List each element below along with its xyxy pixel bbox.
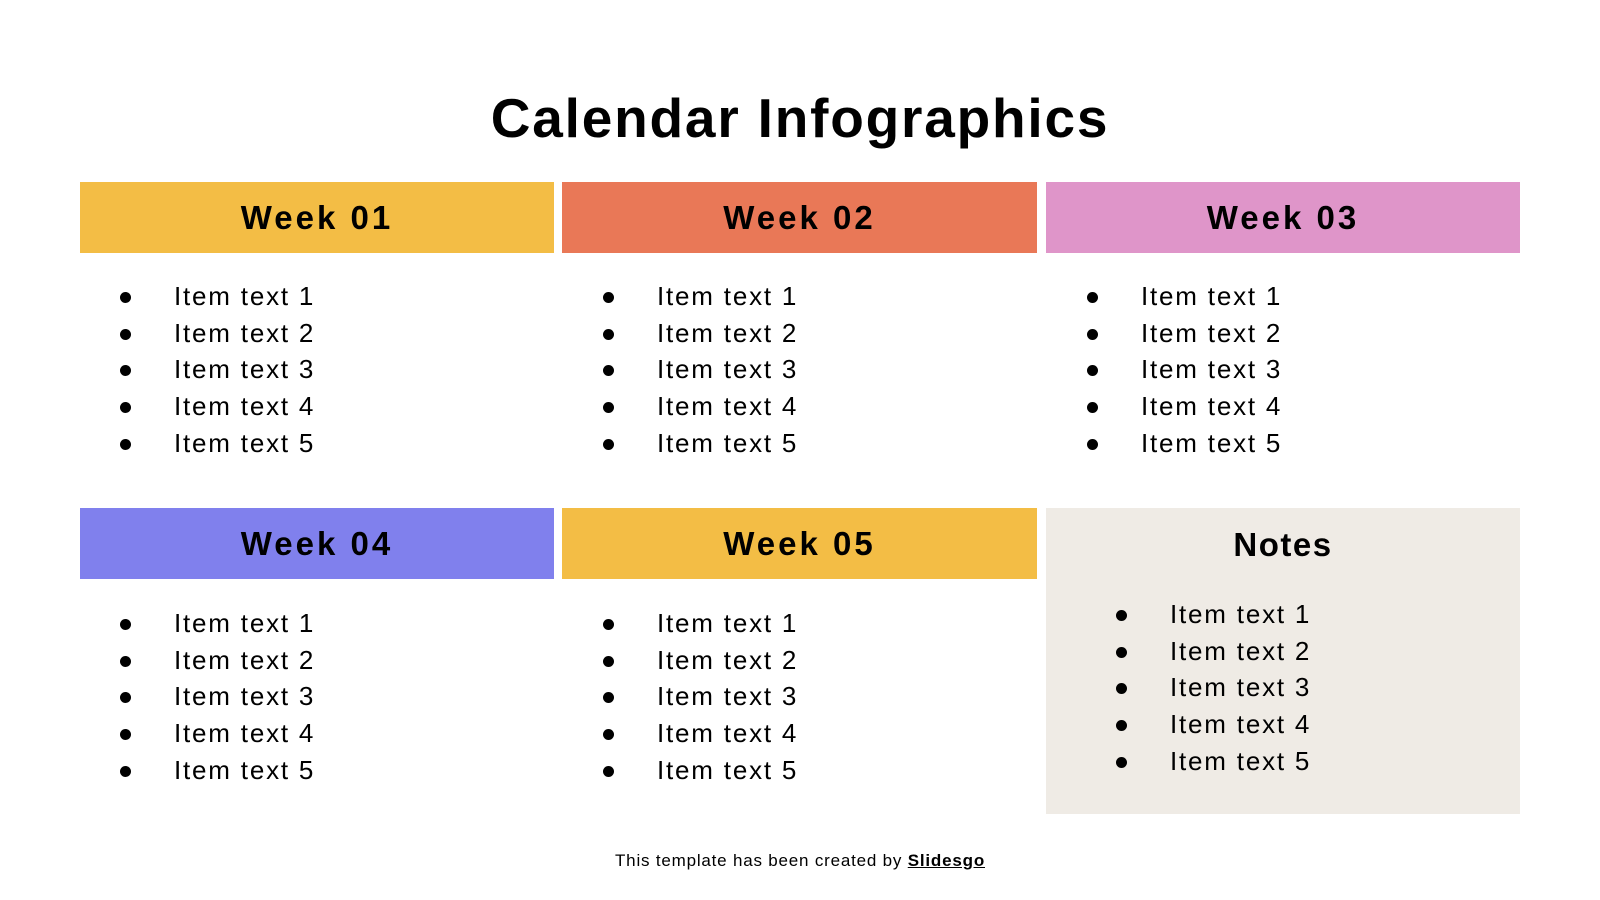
list: week 03: Item text 1 [1141, 281, 1282, 311]
list: week 04: Item text 1 [174, 608, 315, 638]
panel: week 04 header [80, 508, 554, 579]
list: week 05: Item text 1 [657, 608, 798, 638]
notes list: Item text 1 [1170, 599, 1311, 629]
list: week 04: Item text 4 [174, 718, 315, 748]
notes list: Item text 5 [1170, 746, 1311, 776]
list: week 05: Item text 4 [657, 718, 798, 748]
list: week 03: Item text 4 [1141, 391, 1282, 421]
footer credit: This template has been created by Slidesgo [615, 851, 985, 870]
list: week 02: Item text 5 [657, 428, 798, 458]
list: week 02 [603, 281, 798, 458]
panel: week 02 header: Week 02 [723, 198, 876, 236]
list: week 01 [120, 281, 315, 458]
list: week 02: Item text 3 [657, 354, 798, 384]
list: week 04: Item text 2 [174, 645, 315, 675]
notes list: Item text 3 [1170, 672, 1311, 702]
list: week 03: Item text 3 [1141, 354, 1282, 384]
list: week 05: Item text 3 [657, 681, 798, 711]
list: week 01: Item text 3 [174, 354, 315, 384]
panel: week 02 header [562, 182, 1037, 253]
list: week 04: Item text 5 [174, 755, 315, 785]
list: week 02: Item text 2 [657, 318, 798, 348]
panel: week 05 header [562, 508, 1037, 579]
list: week 05: Item text 5 [657, 755, 798, 785]
panel: week 03 header: Week 03 [1207, 198, 1359, 236]
list: week 05 [603, 608, 798, 785]
list: week 02: Item text 1 [657, 281, 798, 311]
list: week 04 [120, 608, 315, 785]
panel: week 04 header: Week 04 [241, 524, 393, 562]
panel: week 05 header: Week 05 [723, 524, 876, 562]
list: week 03 [1087, 281, 1282, 458]
title: Calendar Infographics [491, 87, 1109, 149]
panel: notes [1046, 508, 1520, 814]
list: week 04: Item text 3 [174, 681, 315, 711]
panel: week 03 header [1046, 182, 1520, 253]
list: week 01: Item text 2 [174, 318, 315, 348]
list: week 01: Item text 5 [174, 428, 315, 458]
list: week 05: Item text 2 [657, 645, 798, 675]
list: week 03: Item text 5 [1141, 428, 1282, 458]
notes heading: Notes [1233, 526, 1333, 563]
list: week 03: Item text 2 [1141, 318, 1282, 348]
list: week 01: Item text 1 [174, 281, 315, 311]
panel: week 01 header [80, 182, 554, 253]
notes list: Item text 4 [1170, 709, 1311, 739]
list: week 02: Item text 4 [657, 391, 798, 421]
notes list [1116, 599, 1311, 776]
panel: week 01 header: Week 01 [241, 198, 393, 236]
notes list: Item text 2 [1170, 636, 1311, 666]
list: week 01: Item text 4 [174, 391, 315, 421]
